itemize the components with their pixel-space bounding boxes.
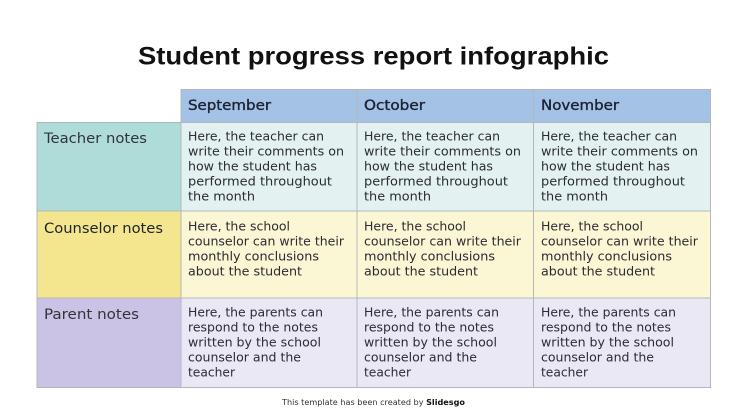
cell: teacher October: write their comments on (364, 144, 521, 158)
cell: teacher November: Here, the teacher can (541, 130, 677, 144)
cell: counselor September: Here, the school (188, 220, 290, 234)
cell: counselor October: counselor can write their (364, 234, 522, 248)
cell: teacher November: performed throughout (541, 174, 685, 188)
cell: counselor October (364, 220, 522, 278)
cell: parent November (541, 306, 676, 380)
cell: parent September (188, 306, 323, 380)
cell: teacher November: the month (541, 190, 608, 204)
cell: parent September: teacher (188, 366, 236, 380)
header row (181, 90, 710, 122)
cell: parent November: counselor and the (541, 350, 654, 364)
header: November: November (541, 98, 619, 114)
header: October: October (364, 98, 425, 114)
cell: teacher October (364, 130, 521, 204)
cell: parent September: written by the school (188, 336, 321, 350)
cell: counselor September (188, 220, 345, 278)
cell: counselor October: Here, the school (364, 220, 466, 234)
cell: parent October: counselor and the (364, 350, 477, 364)
row: parent notes (37, 298, 710, 388)
cell: counselor November: about the student (541, 264, 655, 278)
cell: teacher October: performed throughout (364, 174, 508, 188)
cell: parent October: teacher (364, 366, 412, 380)
header: September: September (188, 98, 271, 114)
row: teacher notes (37, 122, 710, 211)
label: parent notes: Parent notes (44, 307, 139, 323)
cell: teacher November: write their comments on (541, 144, 698, 158)
label: teacher notes: Teacher notes (43, 131, 147, 147)
cell: counselor October: about the student (364, 264, 478, 278)
cell: teacher September: performed throughout (188, 174, 332, 188)
cell: parent November: written by the school (541, 336, 674, 350)
cell: parent September: respond to the notes (188, 320, 318, 334)
cell: counselor November: Here, the school (541, 220, 643, 234)
cell: parent November: teacher (541, 366, 589, 380)
cell: teacher October: the month (364, 190, 431, 204)
cell: parent October: written by the school (364, 336, 497, 350)
cell: teacher September: the month (188, 190, 255, 204)
cell: counselor November: monthly conclusions (541, 250, 672, 264)
cell: parent October (364, 306, 499, 380)
table (37, 90, 710, 388)
row: counselor notes (37, 211, 710, 298)
cell: counselor October: monthly conclusions (364, 250, 495, 264)
title: Student progress report infographic (138, 42, 609, 70)
cell: counselor September: monthly conclusions (188, 250, 319, 264)
cell: teacher September (188, 130, 344, 204)
cell: parent September: counselor and the (188, 350, 301, 364)
cell: parent October: respond to the notes (364, 320, 494, 334)
cell: teacher November (541, 130, 698, 204)
cell: counselor November: counselor can write their (541, 234, 699, 248)
cell: teacher October: Here, the teacher can (364, 130, 500, 144)
footer credit: This template has been created by Slidesgo (281, 398, 465, 407)
cell: parent November: Here, the parents can (541, 306, 676, 320)
label: counselor notes: Counselor notes (44, 221, 163, 237)
cell: parent October: Here, the parents can (364, 306, 499, 320)
cell: teacher September: write their comments on (188, 144, 344, 158)
cell: parent November: respond to the notes (541, 320, 671, 334)
cell: teacher September: Here, the teacher can (188, 130, 324, 144)
cell: teacher November: how the student has (541, 160, 670, 174)
cell: counselor September: counselor can write their (188, 234, 345, 248)
cell: parent September: Here, the parents can (188, 306, 323, 320)
cell: teacher September: how the student has (188, 160, 317, 174)
cell: counselor November (541, 220, 699, 278)
cell: teacher October: how the student has (364, 160, 493, 174)
cell: counselor September: about the student (188, 264, 302, 278)
